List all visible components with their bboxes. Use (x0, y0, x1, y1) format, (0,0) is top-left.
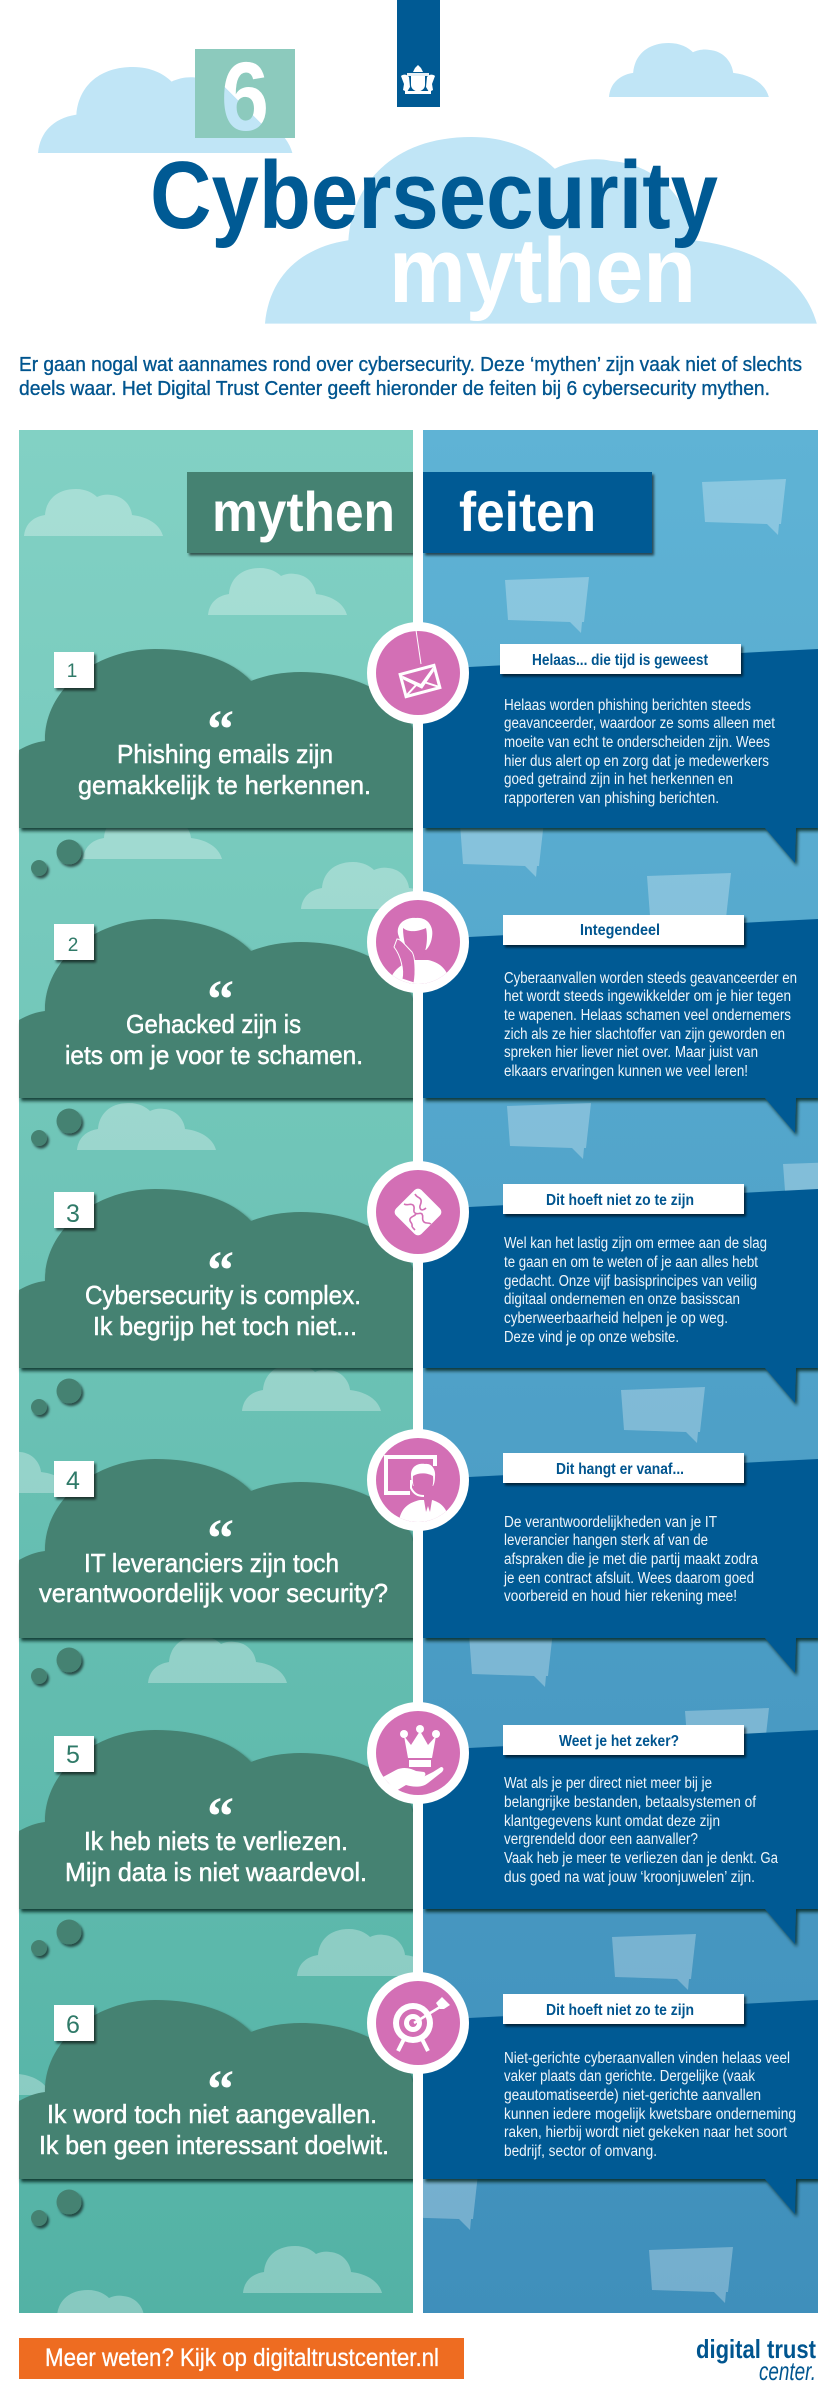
fact heading (503, 1184, 744, 1214)
fact text: elkaars ervaringen kunnen we veel leren! (504, 1063, 748, 1080)
thought bubble dots under myth 2 (31, 1108, 82, 1146)
fact 1 (423, 644, 818, 863)
fact heading: Weet je het zeker? (559, 1733, 679, 1750)
panel: mythen background (19, 430, 413, 2313)
myth text: Ik ben geen interessant doelwit. (39, 2130, 389, 2160)
right margin mask (818, 430, 830, 2313)
fact text: Wel kan het lastig zijn om ermee aan de slag (504, 1235, 767, 1252)
intro text: Er gaan nogal wat aannames rond over cybersecurity. Deze ‘mythen’ zijn vaak niet of slechts (19, 354, 802, 376)
fact heading (503, 1453, 744, 1483)
header cloud: large behind title (265, 137, 817, 324)
title (150, 142, 718, 322)
quote mark: “ (207, 1786, 234, 1846)
myth text: verantwoordelijk voor security? (39, 1578, 388, 1608)
icon: puzzle diamond (367, 1161, 469, 1263)
fact text: raken, hierbij wordt niet gekeken naar het soort (504, 2124, 788, 2141)
heading: mythen (187, 472, 413, 553)
heading: feiten: feiten (459, 480, 596, 543)
fact heading: Dit hoeft niet zo te zijn (546, 2002, 694, 2019)
heading: mythen: mythen (212, 480, 395, 543)
heading: feiten (423, 472, 652, 553)
thought bubble dots under myth 4 (31, 1648, 82, 1684)
fact text: geautomatiseerde) niet-gerichte aanvallen (504, 2087, 761, 2104)
myth text: Ik begrijp het toch niet... (93, 1311, 357, 1341)
header cloud: left (38, 67, 292, 153)
number 2: 2 (68, 935, 78, 956)
fact text: De verantwoordelijkheden van je IT (504, 1514, 717, 1531)
myth text: Ik word toch niet aangevallen. (47, 2099, 377, 2129)
fact text: Deze vind je op onze website. (504, 1329, 679, 1346)
quote mark: “ (207, 2059, 234, 2119)
quote mark: “ (207, 1240, 234, 1300)
fact 2 (423, 915, 818, 1133)
fact text: cyberweerbaarheid helpen je op weg. (504, 1310, 728, 1327)
number 3: 3 (66, 1200, 80, 1228)
myth 1 (19, 649, 413, 828)
logo ribbon with emblem (397, 0, 440, 107)
intro text: deels waar. Het Digital Trust Center geeft hieronder de feiten bij 6 cybersecurity mythen. (19, 378, 770, 400)
number 5: 5 (66, 1741, 80, 1769)
intro text (19, 354, 802, 400)
fact text: te wapenen. Helaas schamen veel ondernemers (504, 1007, 791, 1024)
fact text: het wordt steeds ingewikkelder om je hier tegen (504, 988, 791, 1005)
fact text: Niet-gerichte cyberaanvallen vinden helaas veel (504, 2050, 790, 2067)
icon: phishing envelope (367, 622, 469, 724)
fact text (503, 1514, 758, 1605)
thought bubble dots under myth 5 (31, 1920, 82, 1956)
title: mythen (389, 220, 696, 322)
myth text: Gehacked zijn is (126, 1009, 301, 1039)
quote mark: “ (207, 699, 234, 759)
myth 5 (19, 1730, 413, 1909)
fact heading: Dit hoeft niet zo te zijn (546, 1192, 694, 1209)
panel: feiten background (423, 430, 818, 2313)
myth text: Cybersecurity is complex. (85, 1280, 361, 1310)
fact text (504, 697, 776, 807)
number 1 (54, 652, 94, 688)
logo: digital trust center (696, 2334, 816, 2386)
number 4 (54, 1461, 94, 1497)
fact heading (503, 915, 744, 945)
icon: target with arrow (367, 1972, 469, 2074)
myth text (39, 1548, 388, 1608)
fact text: gedacht. Onze vijf basisprincipes van veilig (504, 1273, 757, 1290)
fact text: digitaal ondernemen en onze basisscan (504, 1291, 740, 1308)
fact text: hier dus alert op en zorg dat je medewerkers (504, 753, 769, 770)
fact text: vergrendeld door een aanvaller? (504, 1831, 698, 1848)
icon: ashamed person (367, 891, 469, 993)
fact text: afspraken die je met die partij maakt zodra (504, 1551, 758, 1568)
fact text: geavanceerder, waardoor ze soms alleen met (504, 715, 776, 732)
call to action bar: Meer weten? Kijk op digitaltrustcenter.nl (45, 2344, 439, 2372)
fact text: dus goed na wat jouw ‘kroonjuwelen’ zijn. (504, 1869, 755, 1886)
fact text: te gaan en om te weten of je aan alles hebt (504, 1254, 759, 1271)
fact text (504, 970, 797, 1080)
fact text: Wat als je per direct niet meer bij je (504, 1775, 712, 1792)
fact text (504, 2050, 796, 2160)
myth 3 (19, 1189, 413, 1368)
fact text: leverancier hangen sterk af van de (504, 1532, 708, 1549)
myth 2 (19, 919, 413, 1098)
myth text (39, 2099, 389, 2160)
title: Cybersecurity (150, 142, 718, 249)
fact text: goed getraind zijn in het herkennen en (504, 771, 733, 788)
fact text: belangrijke bestanden, betaalsystemen of (504, 1794, 757, 1811)
fact text: voorbereid en houd hier rekening mee! (504, 1588, 737, 1605)
icon: crown on hand (367, 1702, 469, 1804)
fact text: Helaas worden phishing berichten steeds (504, 697, 751, 714)
fact text: kunnen iedere mogelijk kwetsbare onderneming (504, 2106, 796, 2123)
fact heading (500, 644, 741, 674)
myth text (65, 1009, 363, 1070)
thought bubble dots under myth 1 (31, 840, 82, 876)
fact 6 (423, 1994, 818, 2214)
fact text (504, 1235, 767, 1346)
number 6: 6 (66, 2011, 80, 2039)
thought bubble dots under myth 6 (31, 2190, 82, 2226)
myth text: Ik heb niets te verliezen. (84, 1826, 348, 1856)
fact text: klantgegevens kunt omdat deze zijn (504, 1813, 720, 1830)
myth text: IT leveranciers zijn toch (84, 1548, 339, 1578)
header cloud: right (609, 43, 769, 97)
fact text: moeite van echt te onderscheiden zijn. Wees (504, 734, 770, 751)
fact 4 (423, 1453, 818, 1673)
number 1: 1 (67, 661, 77, 682)
fact text: vaker plaats dan gerichte. Dergelijke (vaak (504, 2068, 755, 2085)
quote mark: “ (207, 1508, 234, 1568)
background speech bubbles in feiten panel (394, 479, 830, 2303)
fact heading: Dit hangt er vanaf... (556, 1461, 684, 1478)
fact 5 (423, 1725, 818, 1944)
thought bubble dots under myth 3 (31, 1378, 82, 1415)
number 6 (54, 2005, 94, 2041)
fact 3 (423, 1184, 818, 1403)
fact heading (503, 1994, 744, 2024)
fact text: je een contract afsluit. Wees daarom goed (503, 1570, 754, 1587)
myth 6 (19, 2000, 413, 2179)
myth text: Phishing emails zijn (117, 739, 333, 769)
myth text: gemakkelijk te herkennen. (78, 770, 371, 800)
icon: IT support person at monitor (367, 1429, 469, 1531)
badge: 6 (195, 42, 295, 151)
background clouds in mythen panel (0, 489, 440, 2337)
myth text (78, 739, 371, 800)
quote mark: “ (207, 969, 234, 1029)
fact text: spreken hier liever niet over. Maar juist van (504, 1044, 758, 1061)
fact text: Vaak heb je meer te verliezen dan je denkt. Ga (504, 1850, 778, 1867)
myth text: iets om je voor te schamen. (65, 1040, 363, 1070)
fact text (504, 1775, 778, 1886)
fact text: bedrijf, sector of omvang. (504, 2143, 657, 2160)
myth text (65, 1826, 367, 1887)
myth 4 (19, 1459, 413, 1638)
number 3 (54, 1192, 94, 1228)
myth text: Mijn data is niet waardevol. (65, 1857, 367, 1887)
number 5 (54, 1736, 94, 1772)
fact heading: Integendeel (580, 922, 660, 939)
central white divider (413, 430, 423, 2313)
myth text (85, 1280, 361, 1341)
fact text: zich als ze hier slachtoffer van zijn geworden en (504, 1026, 785, 1043)
badge: 6: 6 (221, 42, 269, 151)
call to action bar (19, 2338, 464, 2379)
fact heading (503, 1725, 744, 1755)
fact text: rapporteren van phishing berichten. (504, 790, 719, 807)
fact heading: Helaas... die tijd is geweest (532, 652, 709, 669)
number 2 (54, 924, 94, 960)
number 4: 4 (66, 1467, 80, 1495)
